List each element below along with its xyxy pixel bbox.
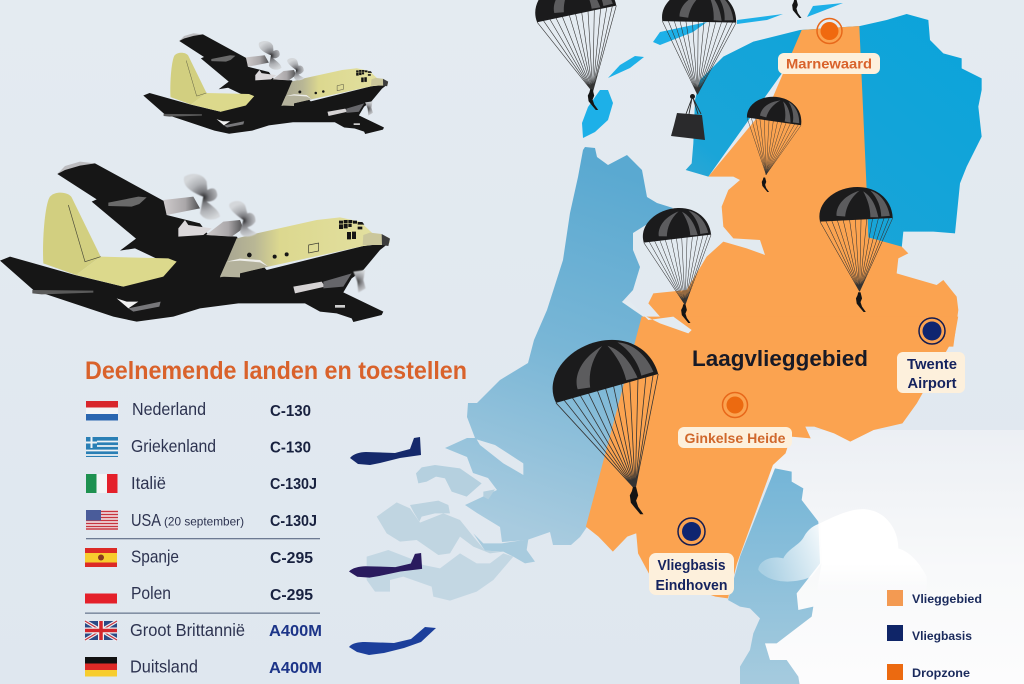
- row: Polen: C-295: [270, 587, 313, 604]
- row: USA: (20 september): [164, 514, 244, 528]
- clouds: [758, 509, 927, 593]
- aircraft silhouette: C-295: [349, 553, 422, 578]
- south-east blue region: [728, 468, 820, 684]
- row: Duitsland: Duitsland: [130, 656, 198, 676]
- parachute: large: [544, 330, 682, 514]
- divider: [85, 612, 320, 614]
- jumper at the top edge: [792, 0, 801, 18]
- orange flight area, south part: [586, 317, 958, 598]
- location: Marnewaard: [778, 18, 880, 74]
- location: Ginkelse Heide: Ginkelse Heide: [684, 430, 786, 446]
- row: Nederland: [86, 399, 311, 420]
- orange flight area, north part: [638, 26, 958, 347]
- row: Duitsland: [85, 656, 322, 677]
- aircraft silhouette: A400M: [349, 627, 436, 655]
- location: Vliegbasis Eindhoven: Eindhoven: [656, 578, 728, 594]
- legend: Vliegbasis: Vliegbasis: [912, 629, 972, 643]
- row: Italië: [86, 473, 317, 493]
- row: Griekenland: [86, 436, 311, 457]
- row: USA: USA: [131, 510, 161, 530]
- Wadden islands: [582, 3, 843, 138]
- row: Groot Brittannië: Groot Brittannië: [130, 620, 245, 640]
- map of the Netherlands: [367, 3, 1024, 684]
- parachute: centre north: [737, 92, 805, 192]
- row: Duitsland: A400M: [269, 660, 322, 677]
- plane, large: [0, 162, 390, 322]
- row: Groot Brittannië: [85, 620, 322, 640]
- legend: [887, 590, 982, 680]
- western provinces in blue: [445, 147, 673, 545]
- parachute: centre: [641, 206, 716, 323]
- location: Vliegbasis Eindhoven: Vliegbasis: [658, 558, 726, 574]
- parachute: top left: [530, 0, 629, 110]
- parachute with cargo crate: [657, 0, 738, 140]
- row: Nederland: C-130: [270, 403, 311, 420]
- row: USA: [86, 510, 317, 530]
- row: Spanje: Spanje: [131, 546, 179, 566]
- Zeeland islands: [367, 439, 535, 601]
- row: Polen: Polen: [131, 583, 171, 603]
- row: Griekenland: C-130: [270, 440, 311, 456]
- location: Twente Airport: Twente: [907, 357, 957, 373]
- inlet detail: [622, 302, 692, 333]
- row: Nederland: Nederland: [132, 399, 206, 419]
- panel heading: Deelnemende landen en toestellen: [85, 357, 467, 385]
- divider: [86, 538, 320, 539]
- row: Groot Brittannië: A400M: [269, 623, 322, 640]
- heading: low-flying area: Laagvlieggebied: [692, 346, 868, 371]
- panel: countries and aircraft: [85, 357, 467, 677]
- legend: Dropzone: Dropzone: [912, 666, 970, 680]
- location: Twente Airport: [897, 318, 965, 393]
- location: Vliegbasis Eindhoven: [649, 518, 734, 595]
- row: USA: C-130J: [270, 513, 317, 530]
- row: Spanje: [85, 546, 313, 567]
- row: Italië: C-130J: [270, 476, 317, 493]
- northern provinces in blue: [686, 14, 982, 248]
- parachute: east: [819, 187, 893, 312]
- row: Spanje: C-295: [270, 550, 313, 567]
- eastern neighbouring land: [760, 430, 1024, 684]
- row: Griekenland: Griekenland: [131, 436, 216, 456]
- location: Marnewaard: Marnewaard: [786, 56, 872, 72]
- row: Italië: Italië: [131, 473, 166, 493]
- location: Twente Airport: Airport: [908, 376, 957, 392]
- plane, small: [143, 33, 388, 134]
- legend: Vlieggebied: Vlieggebied: [912, 592, 982, 606]
- aircraft silhouette: C-130: [350, 437, 421, 465]
- location: Ginkelse Heide: [678, 392, 792, 448]
- row: Polen: [85, 583, 313, 604]
